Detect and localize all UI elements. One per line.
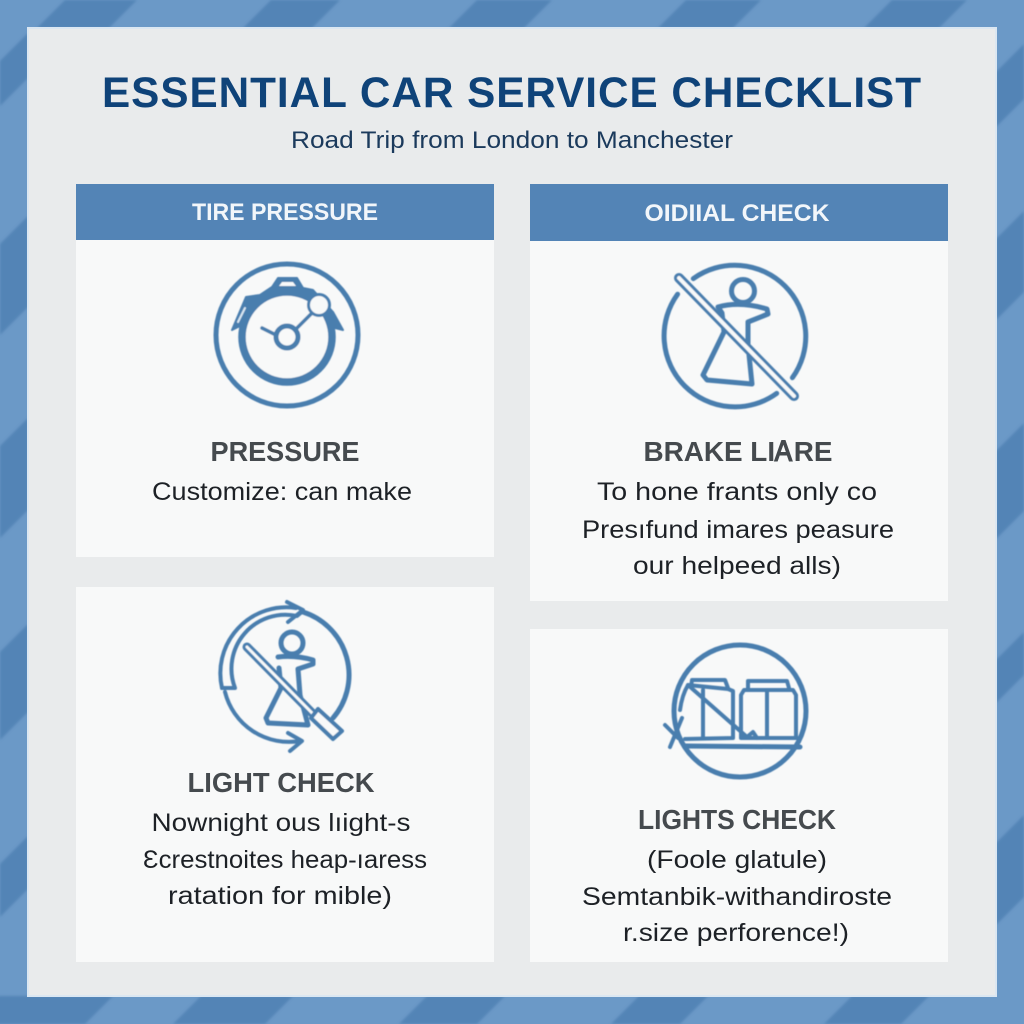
icon: crossed containers xyxy=(665,645,806,777)
item heading: light check: LIGHT CHECK xyxy=(188,767,374,798)
header label: tire pressure: TIRE PRESSURE xyxy=(192,199,378,226)
icon: crossed figure xyxy=(664,265,806,407)
item heading: pressure: PRESSURE xyxy=(210,436,360,467)
icon: rotation figure xyxy=(220,602,349,751)
item text: brake: To hone frants only co xyxy=(597,478,877,506)
panel: light check xyxy=(76,587,494,962)
panel: oil check xyxy=(530,184,948,601)
panel: oil check: Presıfund imares peasure xyxy=(582,516,894,544)
header label: oil check: OIDIIAL CHECK xyxy=(644,200,830,227)
panel: lights check: Semtanbik-withandiroste xyxy=(582,883,892,911)
item heading: brake: BRAKE LIᎪRE xyxy=(644,436,832,467)
panel: tire pressure xyxy=(76,184,494,557)
panel: oil check: our helpeed alls) xyxy=(633,552,841,580)
icon: pressure gauge xyxy=(216,264,358,406)
item text: pressure: Customize: can make xyxy=(152,478,412,506)
item text: lights check: (Foole glatule) xyxy=(647,846,827,874)
panel: light check: ratation for mible) xyxy=(168,882,392,910)
panel: lights check: r.size perforence!) xyxy=(623,919,849,947)
header bar: oil check xyxy=(530,184,948,241)
title: ESSENTIAL CAR SERVICE CHECKLIST xyxy=(102,69,922,117)
item heading: lights check: LIGHTS CHECK xyxy=(638,804,836,835)
subtitle: Road Trip from London to Manchester xyxy=(291,127,733,154)
item text: light check: Nownight ous lıight-s xyxy=(152,809,410,837)
header bar: tire pressure xyxy=(76,184,494,240)
panel: light check: Ɛcrestnoites heap-ıaress xyxy=(143,846,427,874)
panel: lights check xyxy=(530,629,948,962)
